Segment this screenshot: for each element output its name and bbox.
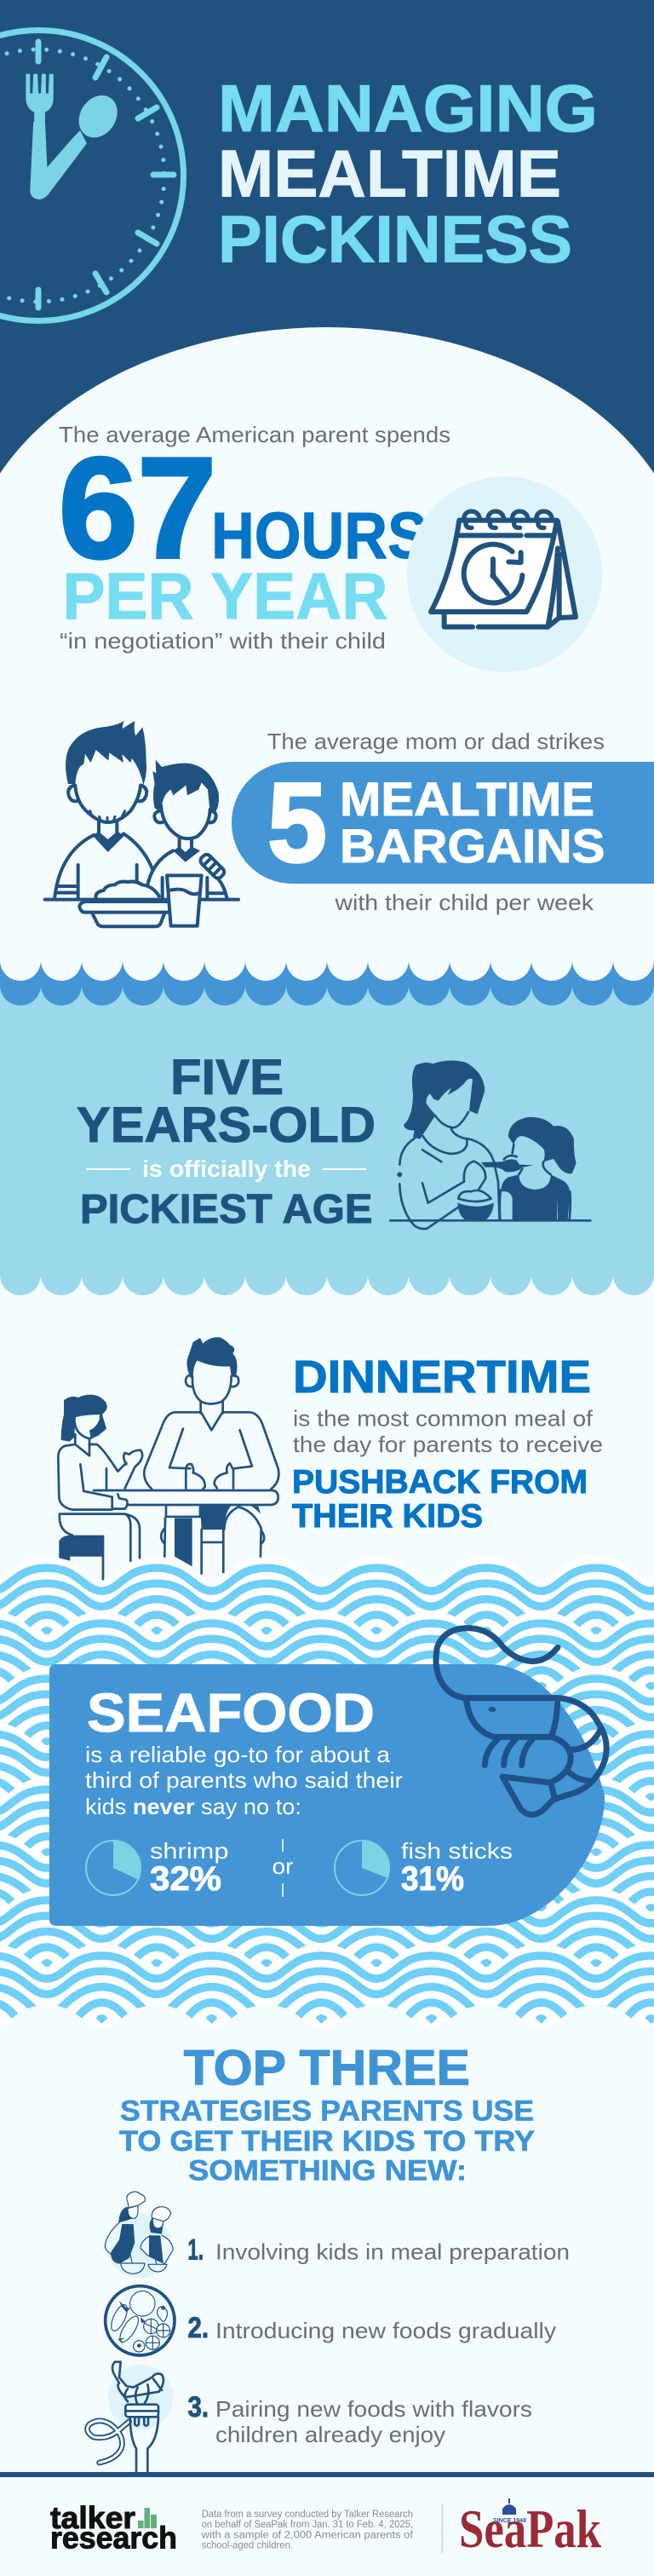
heading: seafood: SEAFOOD xyxy=(87,1682,375,1743)
pill: 5 mealtime bargains: BARGAINS xyxy=(340,819,605,873)
pill: 5 mealtime bargains: 5 xyxy=(267,760,327,886)
item 2: 2. xyxy=(187,2312,209,2344)
icon: plate of food xyxy=(106,2286,175,2355)
title: MANAGING xyxy=(218,71,598,146)
heading: five years-old pickiest age: is officially the xyxy=(142,1155,311,1182)
stat: fish sticks 31%: 31% xyxy=(401,1860,464,1898)
icon: shrimp xyxy=(436,1628,606,1815)
subheading: strategies: TO GET THEIR KIDS TO TRY xyxy=(119,2125,535,2158)
text: in negotiation: “in negotiation” with their child xyxy=(60,628,386,654)
item 1: Involving kids in meal preparation xyxy=(215,2239,570,2265)
text: most common meal: is the most common meal of xyxy=(293,1406,594,1432)
chart: shrimp 32 percent pie xyxy=(86,1841,141,1895)
pill: 5 mealtime bargains: MEALTIME xyxy=(340,772,594,826)
title: PICKINESS xyxy=(218,201,572,276)
icon: parent and child at table xyxy=(58,1337,278,1579)
stat: per year: PER YEAR xyxy=(63,560,388,633)
text: survey source: school-aged children. xyxy=(202,2541,293,2551)
text: survey source: with a sample of 2,000 American parents of xyxy=(201,2531,414,2541)
stat: 67 hours xyxy=(59,428,427,588)
logo: talker research: talker xyxy=(50,2500,135,2535)
item 1 xyxy=(187,2234,570,2267)
text: reliable go-to: kids never say no to: xyxy=(85,1794,301,1819)
panel: top three strategies xyxy=(88,2040,570,2473)
text: survey source: Data from a survey conducted by Talker Research xyxy=(202,2510,413,2520)
text: survey source xyxy=(201,2510,414,2551)
stat: shrimp 32% xyxy=(150,1838,228,1898)
icon: fork with pasta and shrimp xyxy=(88,2362,173,2473)
title: MEALTIME xyxy=(218,136,561,211)
panel: footer xyxy=(50,2498,601,2559)
icon: mother feeding daughter xyxy=(390,1061,590,1229)
stat: fish sticks 31%: fish sticks xyxy=(401,1838,513,1864)
logo: talker research: research xyxy=(50,2521,177,2555)
heading: pushback from their kids: PUSHBACK FROM xyxy=(292,1464,588,1501)
heading: pushback from their kids xyxy=(292,1464,588,1535)
panel: five years-old xyxy=(0,940,654,1295)
pill: 5 mealtime bargains xyxy=(232,760,654,886)
text: most common meal xyxy=(293,1406,603,1457)
text: survey source: on behalf of SeaPak from Jan. 31 to Feb. 4, 2025, xyxy=(202,2520,413,2530)
divider: or xyxy=(272,1839,294,1897)
text: strikes: The average mom or dad strikes xyxy=(267,729,605,754)
text: reliable go-to: third of parents who said their xyxy=(85,1767,403,1793)
text: intro: The average American parent spends xyxy=(59,422,450,447)
stat: fish sticks 31% xyxy=(401,1838,513,1898)
heading: five years-old pickiest age: YEARS-OLD xyxy=(77,1098,376,1153)
heading: five years-old pickiest age: PICKIEST AGE xyxy=(80,1187,373,1232)
icon: calendar with clock xyxy=(407,476,602,672)
panel: waves pattern xyxy=(0,1556,654,2102)
item 1: 1. xyxy=(187,2234,204,2267)
stat: 67 hours: HOURS xyxy=(211,499,427,573)
heading: top three: TOP THREE xyxy=(184,2040,470,2096)
icon: clock with fork and spoon hands xyxy=(0,31,184,320)
title xyxy=(218,71,598,276)
subheading: strategies: SOMETHING NEW: xyxy=(188,2154,467,2187)
text: per week: with their child per week xyxy=(334,890,594,915)
panel: 67 hours xyxy=(59,422,602,672)
heading: five years-old pickiest age xyxy=(77,1050,376,1232)
icon: chefs cooking xyxy=(105,2192,173,2278)
item 3: Pairing new foods with flavors xyxy=(215,2396,532,2422)
text: reliable go-to: is a reliable go-to for about a xyxy=(85,1742,391,1767)
item 2: Introducing new foods gradually xyxy=(215,2318,556,2343)
item 3: children already enjoy xyxy=(215,2422,445,2447)
logo: seapak: SeaPak xyxy=(459,2498,601,2559)
item 3 xyxy=(187,2391,532,2447)
text: most common meal: the day for parents to receive xyxy=(293,1432,603,1457)
text: reliable go-to xyxy=(85,1742,403,1819)
heading: five years-old pickiest age: FIVE xyxy=(170,1050,284,1105)
panel: dinnertime xyxy=(58,1337,603,1579)
stat: 67 hours: 67 xyxy=(59,428,216,588)
heading: dinnertime: DINNERTIME xyxy=(293,1351,591,1403)
subheading: strategies xyxy=(119,2095,535,2187)
white arc background xyxy=(0,327,654,838)
panel: header xyxy=(0,0,654,596)
item 2 xyxy=(187,2312,556,2344)
chart: fish sticks 31 percent pie xyxy=(335,1841,389,1895)
stat: shrimp 32%: 32% xyxy=(150,1860,221,1898)
stat: shrimp 32%: shrimp xyxy=(150,1838,228,1864)
panel: seafood xyxy=(49,1628,606,1926)
panel: 5 mealtime bargains xyxy=(45,721,654,926)
icon: father and son at table xyxy=(45,721,238,926)
item 3: 3. xyxy=(187,2391,209,2423)
logo: seapak: SINCE 1948 xyxy=(493,2518,526,2524)
logo: talker research xyxy=(50,2500,177,2555)
heading: pushback from their kids: THEIR KIDS xyxy=(292,1498,483,1535)
divider: or: or xyxy=(272,1853,294,1879)
subheading: strategies: STRATEGIES PARENTS USE xyxy=(120,2095,534,2127)
